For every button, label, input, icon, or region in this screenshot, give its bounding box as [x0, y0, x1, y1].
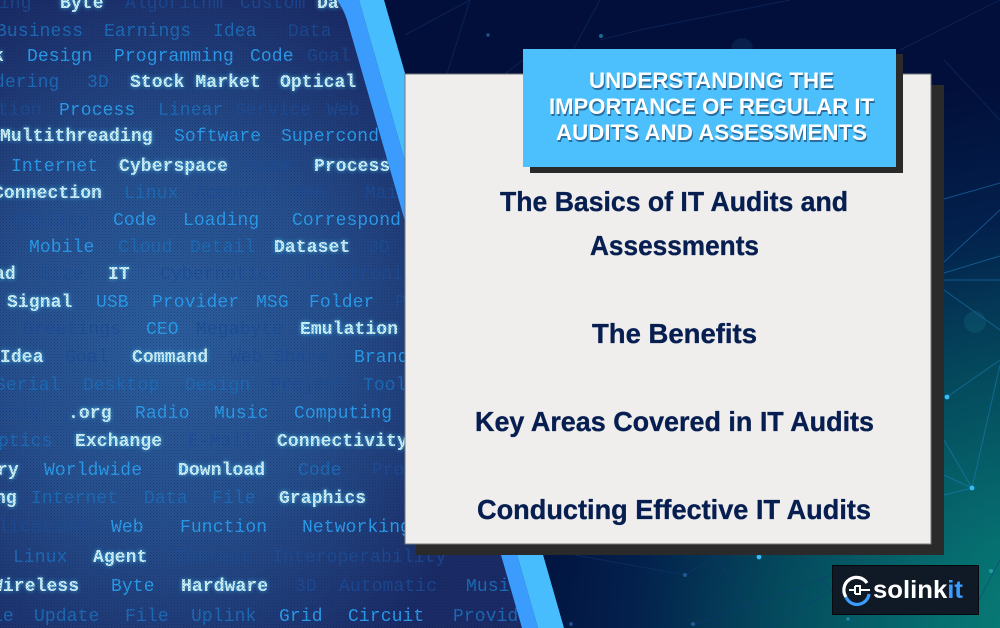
mid words: Grid [279, 607, 323, 627]
mid words: Provider [152, 293, 239, 313]
mid words: Programming [114, 47, 234, 67]
mid words: CEO [146, 320, 179, 340]
muted words: Linux [13, 548, 68, 568]
mid words: Mobile [29, 238, 94, 258]
muted words: Desktop [83, 376, 159, 396]
mid words: Software [174, 127, 261, 147]
bright glowing words: Download [178, 461, 265, 481]
bright glowing words: Exchange [75, 432, 162, 452]
bright glowing words: Connectivity [277, 432, 408, 452]
mid words: Process [59, 101, 135, 121]
icon: plug circle [844, 577, 870, 604]
faint words: Project [270, 376, 346, 396]
faint words: 3D [368, 238, 390, 258]
panel: main card [405, 74, 931, 544]
muted words: Provider [453, 607, 540, 627]
mid words: Brand [354, 348, 409, 368]
title text: IMPORTANCE OF REGULAR IT [550, 96, 876, 121]
bright glowing words: Stock Market [130, 73, 261, 93]
faint words: Goal [307, 47, 351, 67]
faint words: Mail [365, 184, 409, 204]
faint words: Web [293, 184, 326, 204]
diagonal band: light blue [359, 0, 564, 628]
muted words: Update [34, 607, 99, 627]
muted words: Design [185, 376, 250, 396]
section: key areas: Key Areas Covered in IT Audits [475, 406, 874, 437]
faint words: Size [40, 265, 84, 285]
faint words: Goal [65, 348, 109, 368]
mid words: Music [214, 404, 269, 424]
card shadow [416, 85, 944, 555]
title text: UNDERSTANDING THE [590, 70, 835, 95]
muted words: Internet [31, 489, 118, 509]
title text [549, 68, 876, 147]
title text: UNDERSTANDING THE [589, 68, 834, 93]
section: benefits: The Benefits [592, 318, 757, 349]
title box shadow [530, 54, 903, 173]
title box [523, 49, 896, 167]
mid words: Byte [111, 577, 155, 597]
faint words: lication [0, 518, 85, 538]
bright glowing words: Process [314, 157, 390, 177]
mid words: Circuit [348, 607, 424, 627]
faint words: Web Share [230, 348, 328, 368]
title text: AUDITS AND ASSESSMENTS [556, 120, 867, 145]
bright glowing words: Cyberspace [119, 157, 228, 177]
faint words: Web [327, 101, 360, 121]
section: basics: The Basics of IT Audits and [500, 186, 848, 217]
muted words: File [125, 607, 169, 627]
faint words: 3D [295, 577, 317, 597]
muted words: Idea [213, 22, 257, 42]
mid words: Web [111, 518, 144, 538]
section: conducting: Conducting Effective IT Audits [477, 494, 871, 525]
mid words: Radio [135, 404, 190, 424]
logo: solinkit [832, 566, 978, 614]
mid words: Function [180, 518, 267, 538]
muted words: Data [144, 489, 188, 509]
faint words: Pro [372, 461, 405, 481]
title text: AUDITS AND ASSESSMENTS [557, 122, 868, 147]
muted words: Code [298, 461, 342, 481]
bright glowing words: Command [132, 348, 208, 368]
wordmark: solinkit [873, 576, 964, 604]
faint words: Electronic [305, 265, 414, 285]
muted words: Tool [363, 376, 407, 396]
faint words: Torrent [175, 548, 251, 568]
diagonal band: dark blue [337, 0, 538, 628]
bright glowing words: Dataset [274, 238, 350, 258]
mid words: Networking [302, 518, 411, 538]
faint words: Automatic [339, 577, 437, 597]
bright glowing words: Signal [7, 293, 73, 313]
muted words: Earnings [104, 22, 191, 42]
bright glowing words: IT [108, 265, 130, 285]
bright glowing words: Emulation [300, 320, 398, 340]
muted words: Uplink [191, 607, 256, 627]
mid words: Supercond [281, 127, 379, 147]
muted words: File [212, 489, 256, 509]
mid words: Code [113, 211, 157, 231]
mid words: Folder [309, 293, 374, 313]
bright glowing words: Graphics [279, 489, 366, 509]
faint words: P [395, 293, 406, 313]
mid words: Loading [183, 211, 259, 231]
muted words: Linear [158, 101, 223, 121]
section: basics [500, 186, 848, 261]
faint words: E-Mail [188, 432, 253, 452]
faint words: Account [195, 184, 271, 204]
faint words: Ability [13, 211, 89, 231]
bright glowing words [0, 0, 408, 597]
mid words: Computing [294, 404, 392, 424]
mid words: Code [250, 47, 294, 67]
mid words: USB [96, 293, 129, 313]
mid words: Worldwide [44, 461, 142, 481]
mid words: Design [27, 47, 92, 67]
bright glowing words: Idea [0, 348, 44, 368]
mid words [11, 47, 424, 627]
muted words: Cloud [118, 238, 173, 258]
faint words: Greetings [23, 320, 121, 340]
muted words: Linux [124, 184, 179, 204]
list: article sections [475, 186, 874, 525]
title text: IMPORTANCE OF REGULAR IT [549, 94, 875, 119]
muted words: 3D [87, 73, 109, 93]
faint words: Data [288, 22, 332, 42]
muted words [0, 22, 540, 627]
section: basics: Assessments [590, 230, 759, 261]
faint words: Cybernetics [160, 265, 280, 285]
muted words: Detail [190, 238, 255, 258]
faint words: Service [235, 101, 311, 121]
mid words: MSG [256, 293, 289, 313]
bright glowing words: Multithreading [0, 127, 153, 147]
panel: word cloud image [0, 0, 540, 628]
bright glowing words: Agent [93, 548, 148, 568]
mid words: Internet [11, 157, 98, 177]
faint words: Comm [249, 157, 293, 177]
faint words: Interoperability [272, 548, 447, 568]
faint words [0, 0, 447, 597]
mid words: Correspond [292, 211, 401, 231]
muted words: Music [466, 577, 521, 597]
bright glowing words: Optical [280, 73, 356, 93]
bright glowing words: Hardware [181, 577, 268, 597]
faint words: Megabyte [196, 320, 283, 340]
bright glowing words: .org [68, 404, 112, 424]
